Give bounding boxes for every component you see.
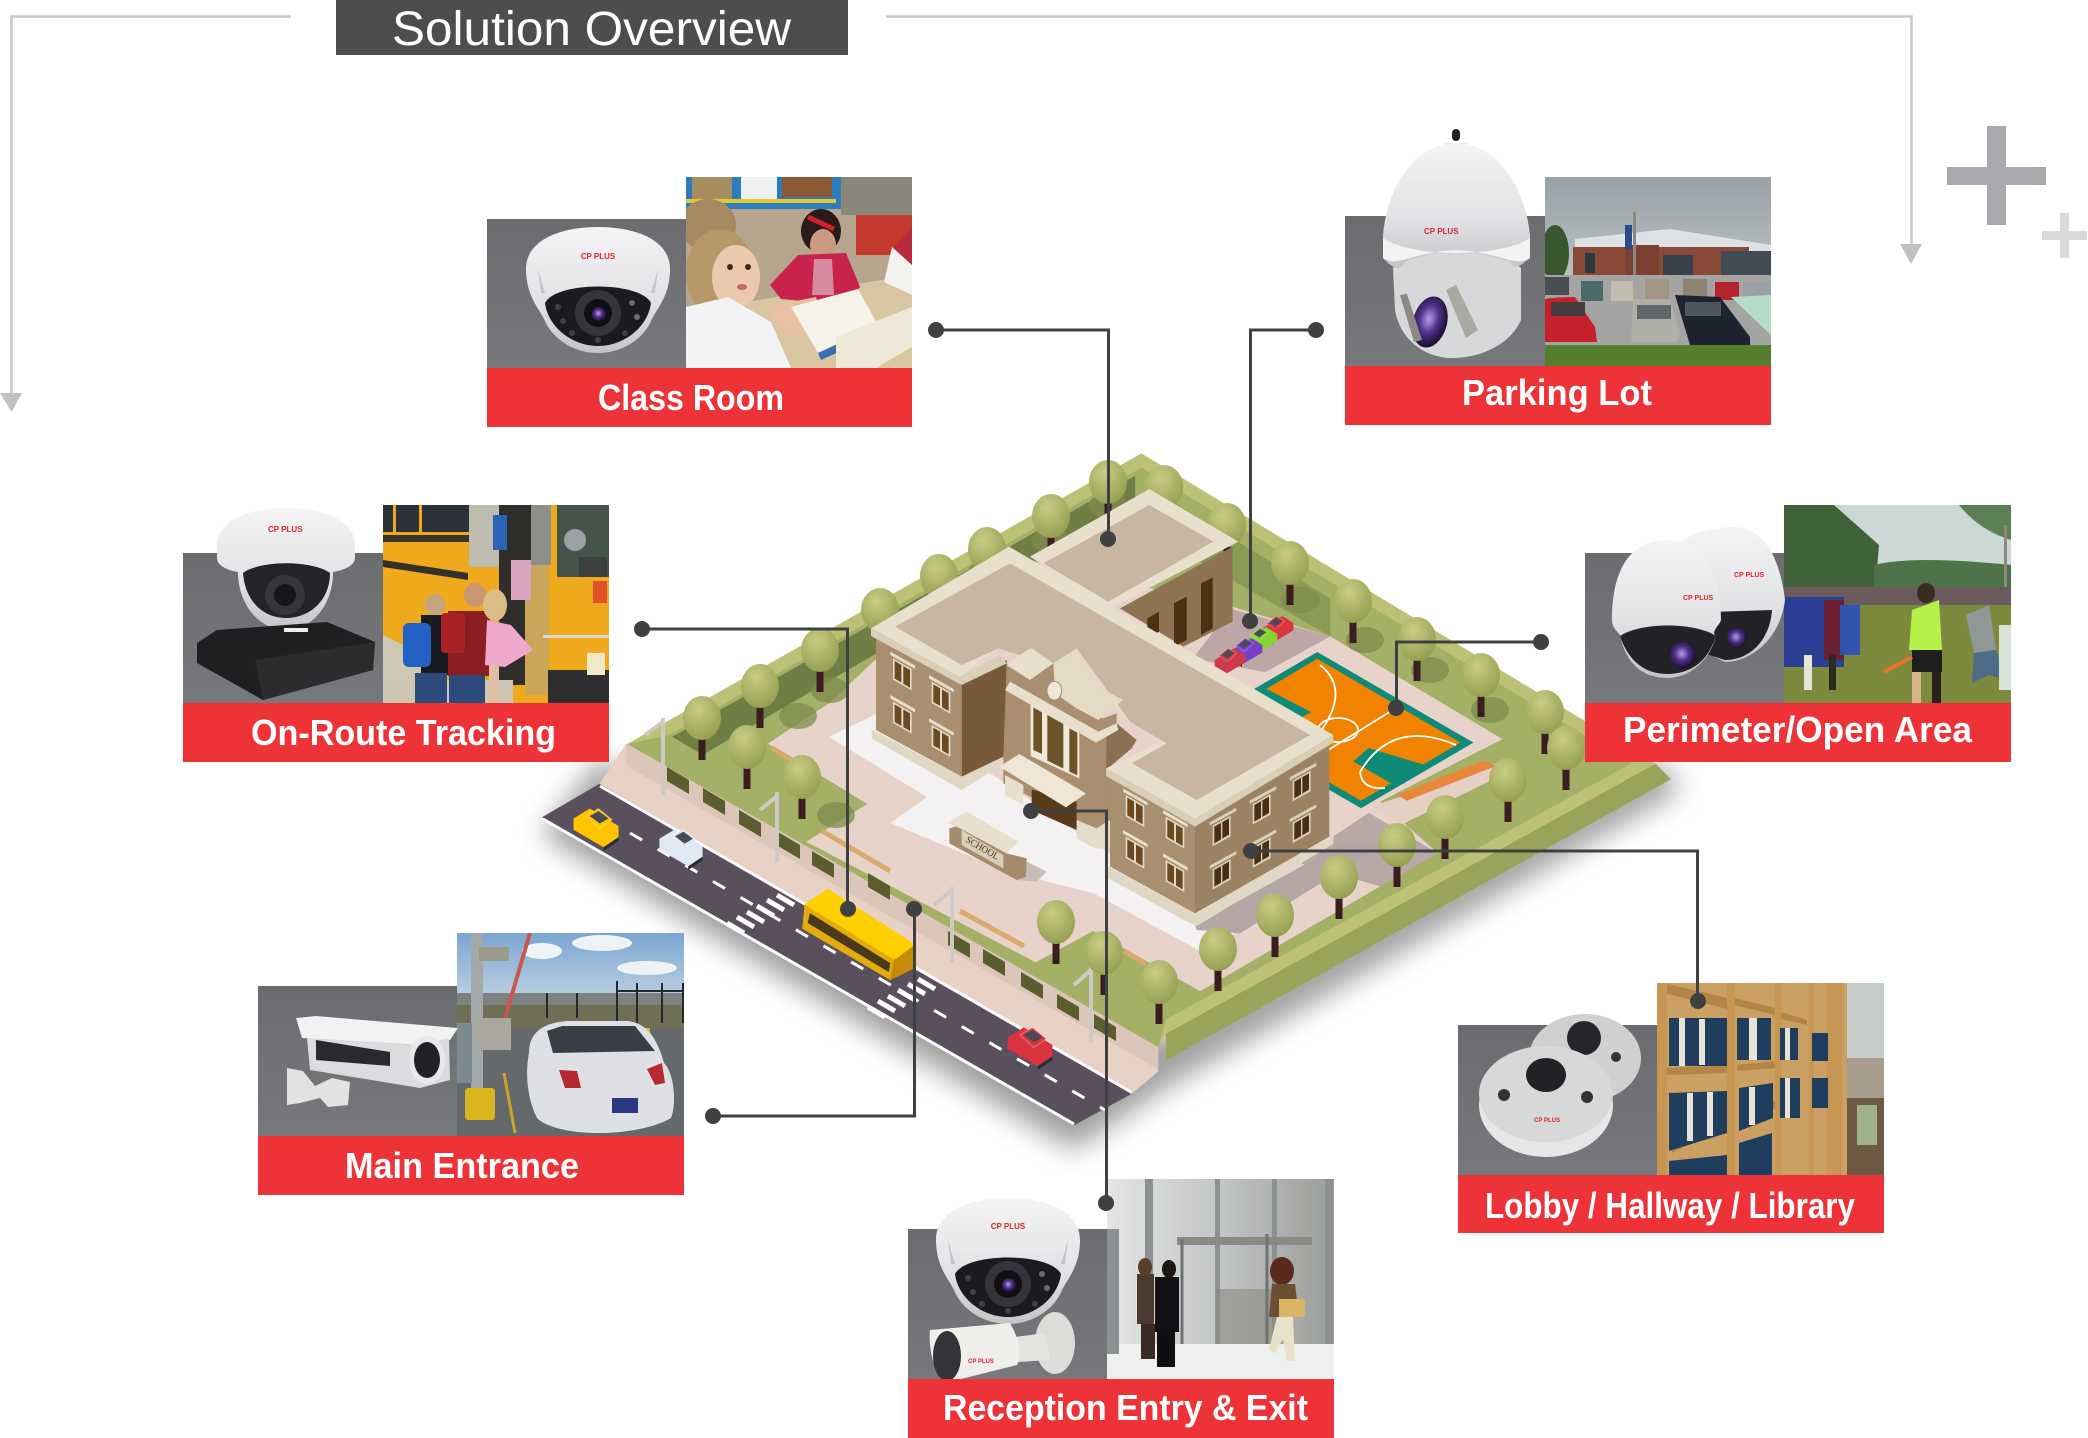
right wing end wall — [1195, 742, 1329, 913]
camera: bullet: CP PLUS — [968, 1359, 994, 1365]
left wing side wall — [876, 635, 962, 777]
plaza — [829, 715, 1246, 951]
camera: dome — [936, 1198, 1080, 1324]
entrance column right — [1077, 820, 1110, 848]
camera: bullet with housing — [287, 1016, 458, 1107]
camera: speed dome PTZ: CP PLUS — [1424, 227, 1459, 236]
connector: Parking Lot — [1242, 322, 1324, 629]
photo: classroom — [686, 177, 912, 368]
camera backdrop — [487, 219, 687, 369]
camera backdrop — [258, 986, 457, 1136]
central window panes — [1033, 707, 1077, 775]
hedge band right — [1112, 502, 1330, 636]
court lines — [1296, 665, 1456, 788]
hedge band — [672, 476, 1135, 755]
card: Parking Lot — [1345, 129, 1771, 425]
camera: fisheye pair: CP PLUS — [1534, 1118, 1560, 1124]
roof fascia right — [1106, 735, 1333, 827]
icon: large plus sign — [1947, 126, 2046, 225]
roof fascia left — [871, 628, 1007, 685]
cornice — [1005, 682, 1118, 743]
annex roof — [1043, 505, 1213, 602]
parking apron — [1193, 609, 1330, 672]
camera: twin speed domes — [1612, 527, 1785, 678]
road lane dashes — [630, 833, 1105, 1110]
label bar — [1345, 366, 1771, 425]
card: Lobby / Hallway / Library — [1458, 983, 1884, 1233]
card: Reception Entry & Exit — [908, 1179, 1334, 1438]
label bar — [258, 1136, 684, 1195]
photo: library shelves — [1657, 983, 1884, 1175]
card: Main Entrance — [258, 933, 684, 1195]
photo: school bus boarding — [383, 505, 609, 703]
label: Parking Lot — [1462, 372, 1652, 413]
label bar — [183, 703, 609, 762]
school building — [871, 489, 1380, 933]
trees behind building shadows — [779, 492, 1509, 828]
court key near — [1353, 748, 1428, 784]
camera backdrop — [1585, 553, 1784, 703]
photo: gate barrier — [457, 933, 684, 1136]
connector: Main Entrance — [705, 901, 922, 1124]
recess shadow by notch — [1106, 723, 1137, 770]
annex roof rim — [1030, 489, 1238, 608]
court key far — [1246, 688, 1311, 722]
boundary wall — [599, 744, 1158, 1094]
parked cars — [1215, 616, 1293, 677]
school bus — [802, 889, 916, 980]
card: Class Room — [487, 177, 912, 427]
camera: dome: CP PLUS — [268, 525, 303, 534]
illustration: isometric school campus — [542, 453, 1680, 1150]
label bar — [908, 1379, 1334, 1438]
building ground shadow — [1195, 843, 1380, 933]
sign panel — [962, 830, 1003, 868]
platform side — [1166, 764, 1671, 1060]
label: Main Entrance — [345, 1145, 579, 1186]
bleachers seats — [1397, 761, 1496, 801]
camera: twin speed domes: CP PLUS — [1734, 572, 1765, 579]
photo: parking lot — [1545, 177, 1771, 366]
road vehicles — [574, 808, 1052, 1070]
porch roof — [999, 754, 1086, 807]
lawn top — [626, 453, 1656, 1048]
crosswalk west — [727, 895, 794, 933]
court surround — [1205, 652, 1473, 808]
left wing windows — [890, 652, 954, 757]
pediment — [1053, 648, 1123, 720]
label: Class Room — [598, 377, 784, 418]
camera: dome — [217, 508, 355, 630]
bleachers base — [1372, 764, 1495, 824]
connector: Perimeter/Open Area — [1388, 634, 1549, 716]
camera: vandal dome — [526, 227, 670, 353]
connector: On-Route Tracking — [634, 621, 856, 917]
label bar — [487, 368, 912, 427]
connector: Lobby / Hallway / Library — [1243, 843, 1706, 1009]
fence panels — [667, 767, 1116, 1041]
paved strip beside building — [1296, 813, 1437, 886]
camera backdrop — [908, 1229, 1107, 1379]
camera: fisheye pair — [1479, 1014, 1641, 1157]
wall face — [626, 744, 1158, 1069]
sign wall — [949, 825, 1027, 880]
right wing windows — [1123, 788, 1188, 892]
camera: dome: CP PLUS — [991, 1222, 1026, 1231]
title banner: Solution Overview: Solution Overview — [392, 3, 791, 56]
parapet step — [1007, 648, 1053, 680]
icon: small plus sign — [2042, 213, 2087, 258]
label: Reception Entry & Exit — [943, 1387, 1308, 1428]
annex tall windows — [1147, 577, 1213, 647]
end wall windows — [1210, 763, 1316, 890]
clock — [1047, 681, 1062, 700]
connector: Reception Entry & Exit — [1023, 803, 1114, 1211]
road edge lines — [543, 786, 1131, 1124]
camera: bullet — [930, 1312, 1075, 1383]
sign cap — [947, 812, 1018, 853]
pink ground around building — [768, 552, 1503, 991]
lawn inner — [626, 468, 1631, 1048]
trees back rows — [683, 460, 1585, 819]
label bar — [1458, 1175, 1884, 1233]
camera: speed dome PTZ — [1383, 129, 1530, 358]
road — [542, 784, 1131, 1125]
left wing recess wall — [962, 660, 1007, 777]
trees front rows — [1037, 758, 1527, 1024]
arrow: left frame line pointing down — [0, 16, 291, 412]
court orange — [1218, 659, 1460, 801]
porch column — [1005, 775, 1023, 805]
label bar — [1585, 703, 2011, 762]
right wing side wall — [1110, 770, 1195, 913]
photo: sports field — [1784, 505, 2011, 703]
camera backdrop — [1345, 216, 1545, 366]
entrance doors — [1032, 789, 1077, 830]
benches — [772, 748, 1146, 964]
camera backdrop — [183, 553, 383, 703]
central facade — [1003, 663, 1117, 848]
card: Perimeter/Open Area — [1585, 505, 2011, 762]
device: mobile DVR — [197, 622, 375, 700]
label: Perimeter/Open Area — [1623, 709, 1973, 750]
crosswalk east — [868, 979, 935, 1017]
photo: lobby with revolving door — [1107, 1179, 1334, 1379]
arrow: right frame line pointing down — [886, 16, 1922, 264]
camera: vandal dome: CP PLUS — [581, 252, 616, 261]
camera: twin speed domes: CP PLUS — [1683, 595, 1714, 602]
camera backdrop — [1458, 1025, 1657, 1175]
central window — [1031, 704, 1079, 778]
sign text: SCHOOL — [963, 835, 1001, 863]
connector: Class Room — [928, 322, 1116, 547]
card: On-Route Tracking — [183, 505, 609, 762]
sign shadow — [1017, 862, 1047, 882]
gable wall — [1010, 663, 1117, 740]
roof rim — [871, 547, 1333, 818]
platform shadow — [542, 760, 1680, 1150]
annex wall — [1120, 547, 1233, 647]
street lamps — [645, 718, 1091, 1042]
label: On-Route Tracking — [251, 712, 556, 753]
roof surface — [895, 563, 1310, 800]
label: Lobby / Hallway / Library — [1485, 1185, 1855, 1226]
base courses — [872, 729, 1003, 790]
